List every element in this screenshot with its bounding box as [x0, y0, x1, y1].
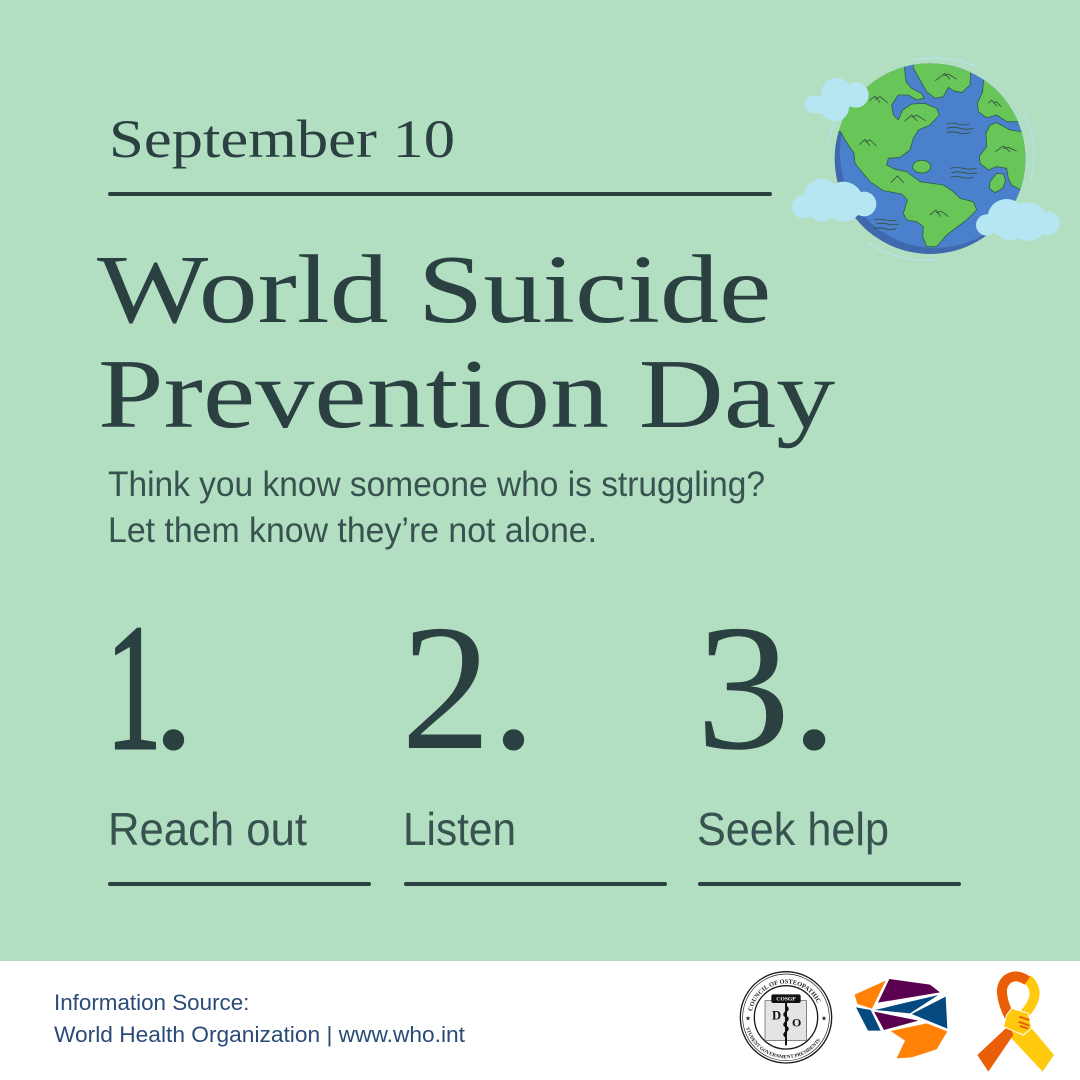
footer band [0, 961, 1080, 1080]
step 1: 1 [106, 589, 162, 788]
logo: COSGP seal: ★ [821, 1015, 827, 1023]
logo: COSGP seal [740, 971, 832, 1064]
title: World Suicide [97, 235, 771, 344]
source text [54, 990, 466, 1047]
title [97, 235, 835, 449]
icon: globe illustration [792, 57, 1060, 260]
logo: COSGP seal: COUNCIL OF OSTEOPATHIC [748, 979, 821, 1011]
date heading: September 10 [109, 109, 455, 169]
logo: COSGP seal: D [772, 1008, 781, 1022]
step 1: Reach out [108, 803, 307, 855]
intro text [108, 465, 765, 550]
logo: COSGP seal: ★ [745, 1015, 751, 1023]
logo: brain [855, 979, 947, 1058]
step 2 [401, 588, 667, 886]
logo: COSGP seal: O [792, 1016, 801, 1030]
continents [838, 63, 1026, 248]
icon: awareness ribbon [977, 976, 1054, 1072]
mountains and waves [859, 73, 1017, 229]
source text: Information Source: [54, 990, 249, 1015]
title: Prevention Day [98, 340, 835, 449]
logo: COSGP seal: COSGP [776, 997, 796, 1003]
date underline [108, 192, 772, 196]
step 3: 3. [696, 588, 838, 787]
step 2: 2. [401, 588, 536, 787]
step 1 [106, 588, 371, 886]
logo: COSGP seal: STUDENT GOVERNMENT PRESIDENTS [746, 1027, 820, 1058]
step 1: . [151, 588, 196, 787]
step 2: Listen [403, 803, 516, 855]
clouds [792, 78, 1060, 241]
intro text: Let them know they’re not alone. [108, 511, 597, 550]
intro text: Think you know someone who is struggling? [108, 465, 765, 504]
step 3 [696, 588, 961, 886]
step 3: Seek help [697, 803, 889, 855]
source text: World Health Organization | www.who.int [54, 1022, 466, 1047]
